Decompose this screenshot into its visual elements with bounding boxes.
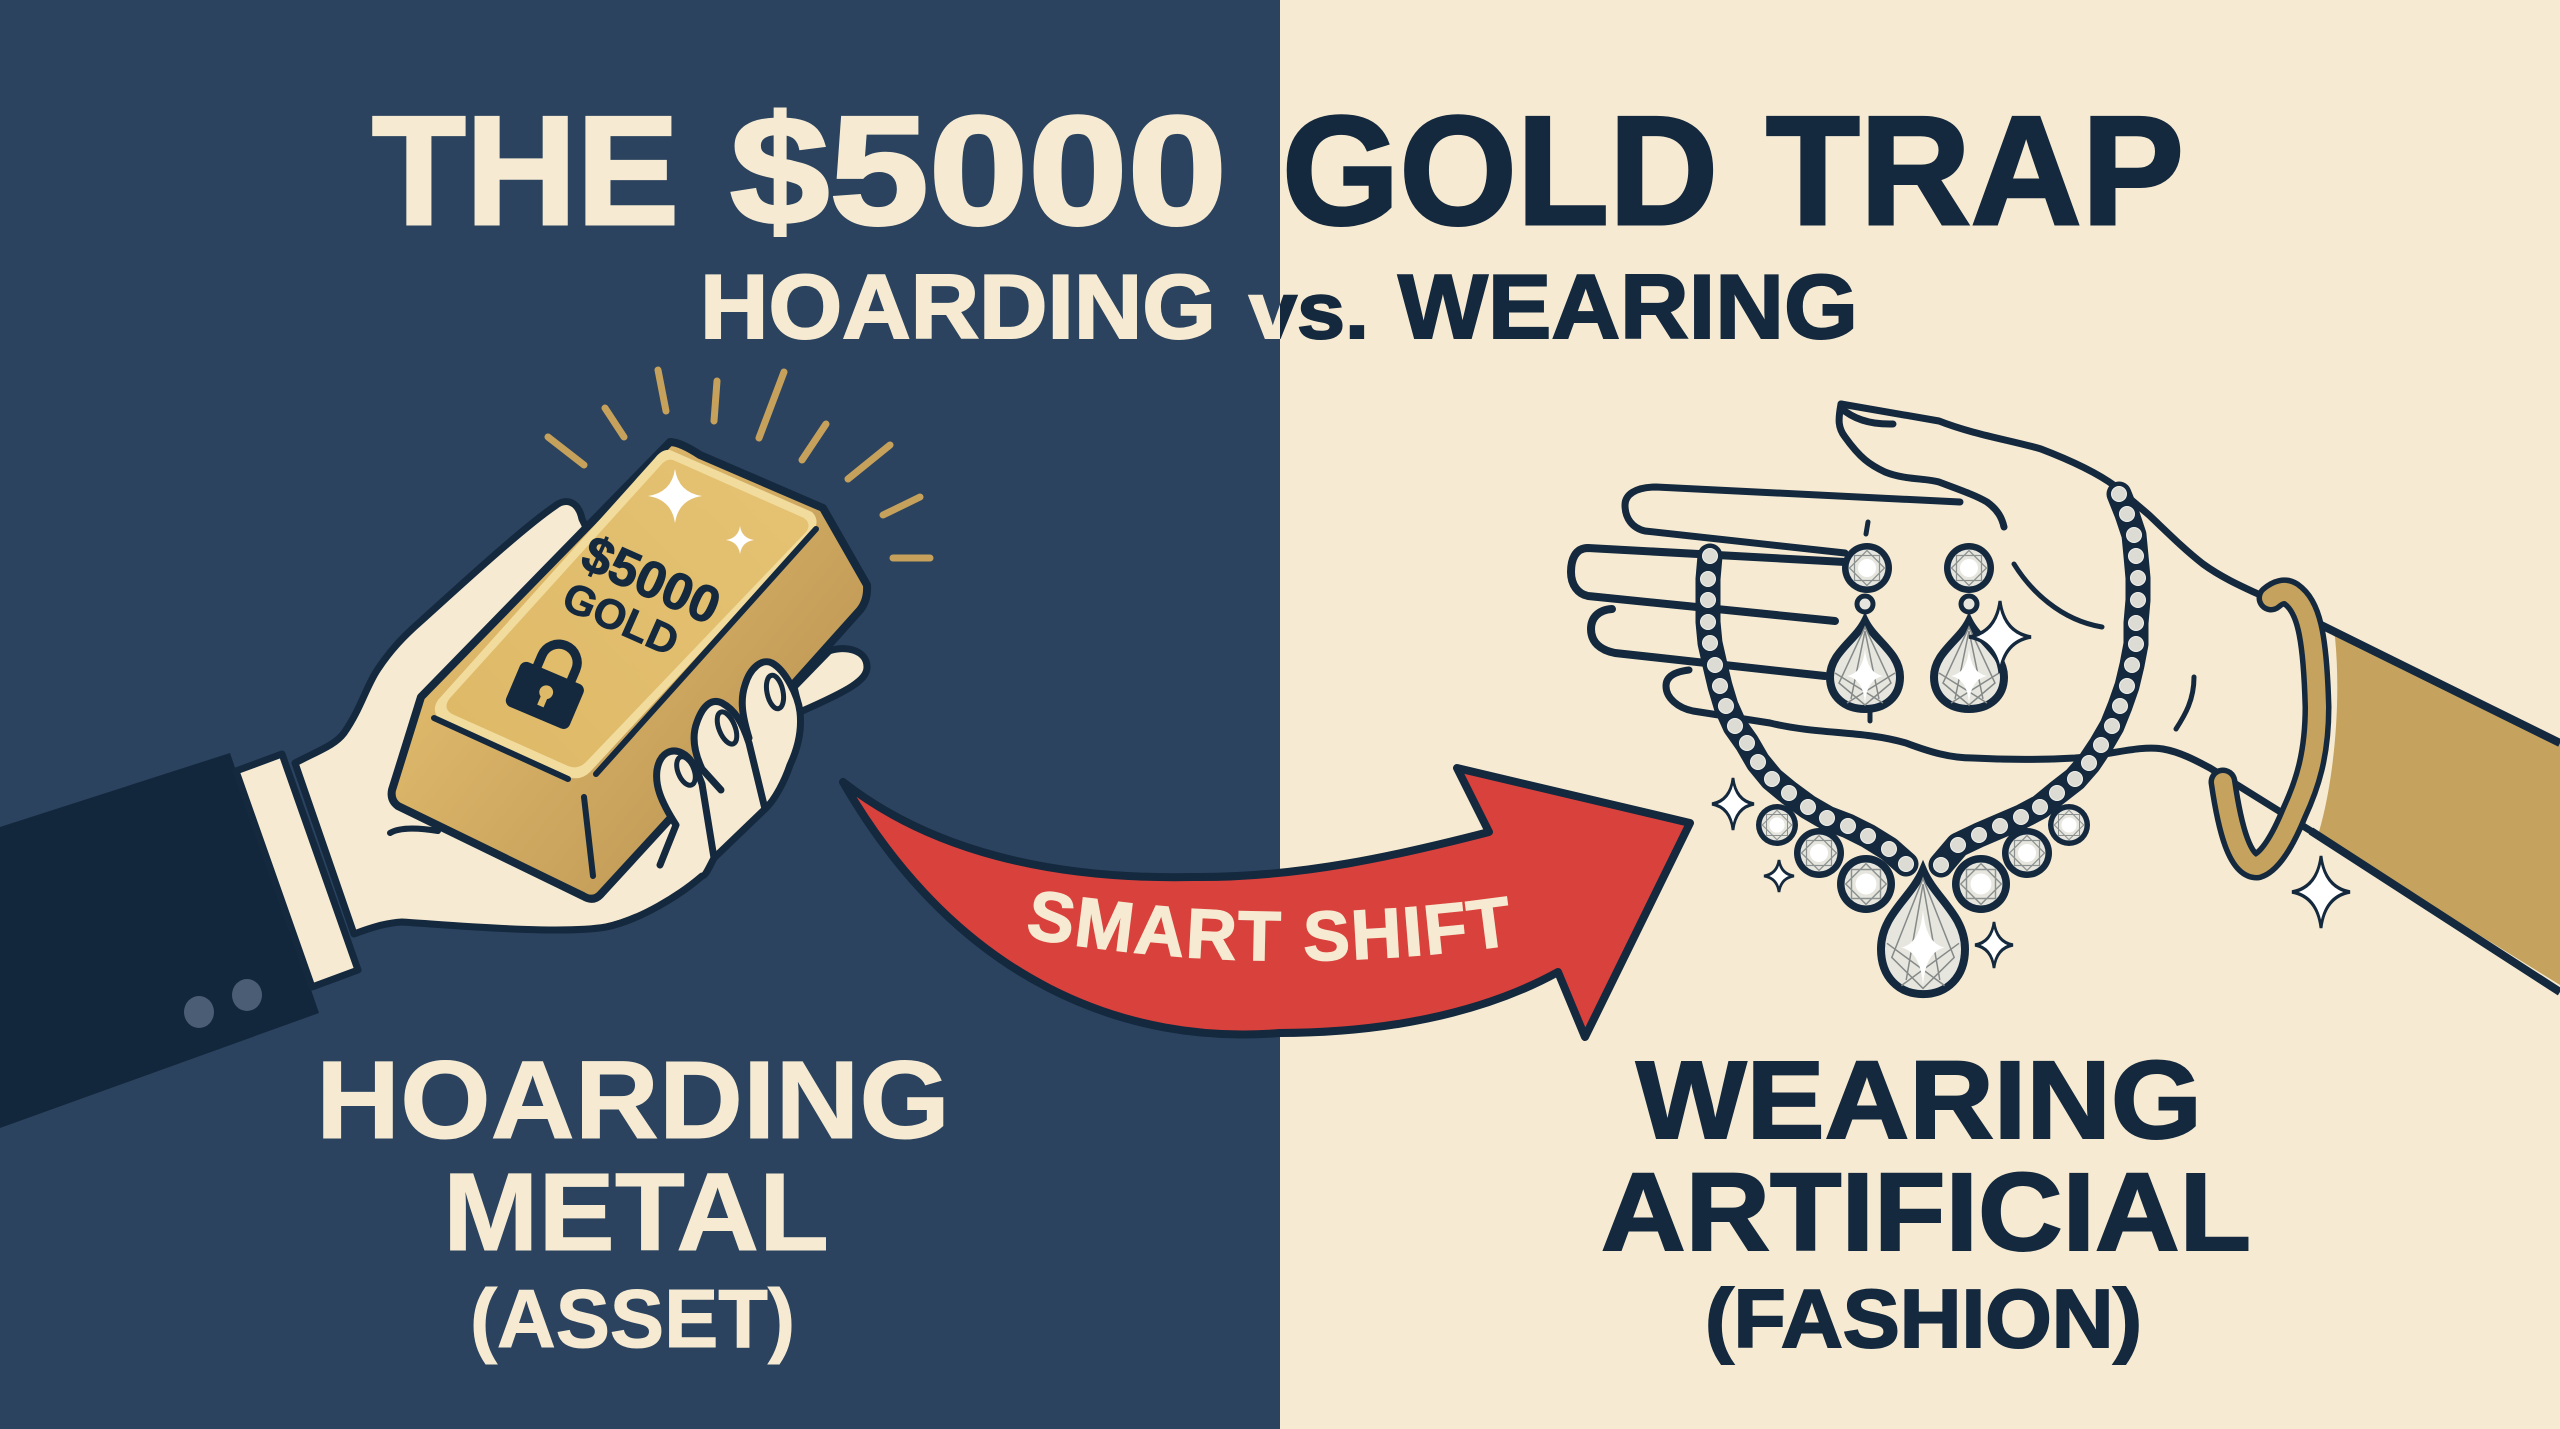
left label: hoarding metal (asset): (ASSET): [470, 1272, 795, 1365]
left label: hoarding metal (asset): HOARDING: [316, 1039, 950, 1162]
necklace strands: [1700, 486, 2146, 872]
subtitle: vs.: [1249, 266, 1369, 355]
title: THE: [372, 84, 679, 257]
illustration: hand with artificial jewellery: [1571, 404, 2560, 994]
gold sleeve: [2318, 625, 2560, 985]
left label: hoarding metal (asset): [316, 1039, 950, 1365]
icon: shine rays: [548, 370, 930, 558]
extended finger: [794, 649, 867, 712]
right label: wearing artificial (fashion): WEARING: [1636, 1039, 2202, 1162]
necklace pendants: [1756, 804, 2090, 994]
panel: navy left background: [0, 0, 1280, 1429]
left earring: [1830, 543, 1900, 709]
bangle: [2223, 592, 2317, 866]
title: GOLD: [1282, 84, 1718, 257]
crease line on palm: [390, 829, 438, 833]
arrow: smart shift: [839, 764, 1694, 1041]
icon: large sparkle on bar: [648, 469, 702, 523]
gold bar: [392, 442, 867, 899]
subtitle: [700, 257, 1858, 358]
suit sleeve: [0, 753, 319, 1128]
hand palm: [295, 502, 714, 934]
right earring: [1934, 543, 2004, 709]
right label: wearing artificial (fashion): ARTIFICIAL: [1601, 1151, 2251, 1274]
hand outline: [1571, 404, 2311, 831]
bar label: GOLD: GOLD: [556, 573, 686, 665]
icon: padlock: [504, 632, 598, 731]
right label: wearing artificial (fashion): [1601, 1039, 2251, 1365]
illustration: hand holding gold bar: [0, 370, 930, 1128]
icon: small sparkle on bar: [726, 526, 754, 554]
arm outline: [2311, 625, 2560, 992]
arrow label: SMART SHIFT: [1028, 891, 1508, 962]
title: TRAP: [1766, 84, 2184, 257]
bar label: $5000: $5000: [573, 525, 729, 636]
left label: hoarding metal (asset): METAL: [443, 1151, 829, 1274]
right label: wearing artificial (fashion): (FASHION): [1705, 1272, 2142, 1365]
subtitle: HOARDING: [700, 257, 1216, 358]
fingers over bar: [606, 662, 801, 927]
title: [372, 84, 2184, 257]
subtitle: WEARING: [1398, 257, 1858, 358]
panel: cream right background: [1280, 0, 2560, 1429]
shirt cuff: [236, 754, 358, 987]
title: $5000: [730, 84, 1227, 257]
icon: diamond sparkles: [1712, 601, 2350, 968]
